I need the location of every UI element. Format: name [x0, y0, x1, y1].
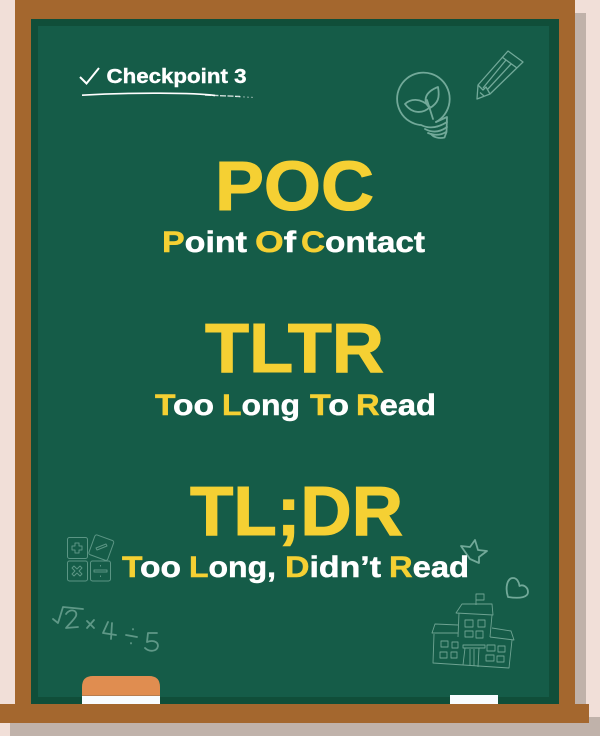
icon: star [461, 540, 487, 563]
acronym: TLTR [155, 309, 436, 422]
TL;DR meaning: Too [122, 551, 181, 584]
heading: checkpoint 3 [80, 65, 255, 98]
TLTR meaning: To [310, 389, 349, 422]
TL;DR meaning: Didn’t [285, 551, 381, 584]
chalk [450, 695, 498, 704]
POC meaning: Contact [301, 226, 425, 259]
icon: light bulb with leaves [397, 73, 450, 138]
icon: check mark [80, 68, 99, 84]
icon: pencil [477, 51, 523, 99]
eraser [82, 676, 160, 704]
POC meaning: Point [162, 226, 247, 259]
icon: school building [432, 594, 514, 668]
acronym: POC [162, 147, 425, 259]
TL;DR title: TL;DR [190, 472, 403, 550]
chalk formula [53, 607, 158, 651]
TLTR meaning: Too [155, 389, 214, 422]
icon: heart [507, 578, 528, 598]
acronym: TL;DR [122, 472, 469, 584]
TLTR meaning: Read [356, 389, 436, 422]
TLTR meaning: Long [222, 389, 300, 422]
TL;DR meaning: Read [389, 551, 469, 584]
TL;DR meaning [122, 551, 469, 584]
POC meaning: Of [255, 226, 297, 259]
POC title: POC [215, 147, 374, 225]
icon: math keys [68, 534, 114, 581]
TLTR title: TLTR [205, 309, 384, 387]
heading text: Checkpoint 3 [106, 65, 246, 88]
TLTR meaning [155, 389, 436, 422]
TL;DR meaning: Long, [189, 551, 276, 584]
POC meaning [162, 226, 425, 259]
chalk underline [82, 93, 255, 98]
